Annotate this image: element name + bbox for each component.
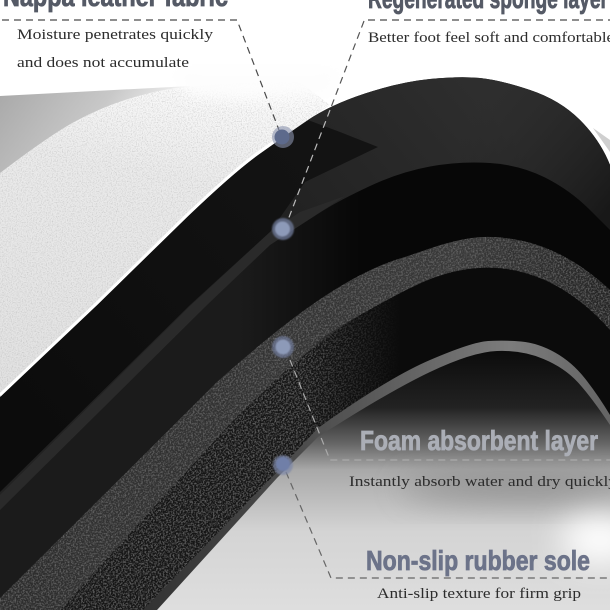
leader line: [290, 360, 610, 460]
description: Better foot feel soft and comfortable: [368, 30, 610, 46]
marker dot: [272, 218, 294, 240]
woven mesh layer: [60, 268, 610, 610]
description: Anti-slip texture for firm grip: [377, 586, 581, 602]
callout: Foam absorbent layer: [272, 336, 610, 490]
smooth dark arch underside: [300, 268, 610, 450]
white Nappa fabric layer: [0, 82, 330, 397]
callout: Regenerated sponge layer: [272, 0, 610, 240]
leader line: [286, 472, 610, 578]
leader line lower: [288, 110, 330, 220]
arch shading on right side: [460, 76, 610, 240]
description: Moisture penetrates quickly: [17, 27, 214, 43]
black layer beneath sponge: [0, 162, 610, 610]
thin strip between black and sponge layers: [0, 196, 345, 510]
leader line: [2, 20, 279, 130]
soft highlight bottom right: [560, 516, 610, 564]
white fabric edge highlight: [0, 139, 278, 395]
marker dot: [273, 455, 293, 475]
callout: Nappa leather fabric: [2, 0, 294, 148]
description second line: and does not accumulate: [17, 55, 189, 71]
inner space under the arch: [157, 351, 610, 610]
leader line upper: [330, 21, 364, 110]
callout: Non-slip rubber sole: [273, 455, 610, 602]
glint on arch right edge: [593, 128, 610, 152]
marker dot: [272, 126, 294, 148]
soft shadow under the arch: [400, 476, 610, 500]
background gray wedge: [0, 86, 190, 180]
marker dot: [272, 336, 294, 358]
rule: [368, 19, 610, 21]
dark gray sponge arch: [0, 77, 610, 560]
fade of fabric into white at the top: [170, 70, 340, 100]
non-slip rubber strip: [143, 341, 610, 610]
description: Instantly absorb water and dry quickly: [349, 474, 610, 490]
foam absorbent layer: [0, 237, 610, 610]
